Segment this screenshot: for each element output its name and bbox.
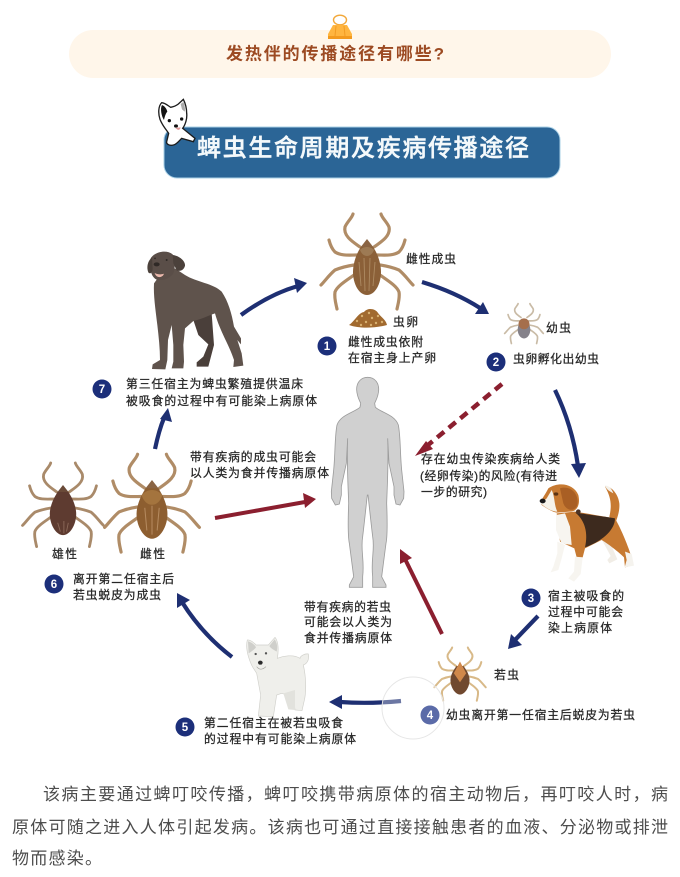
body paragraph: 原体可随之进入人体引起发病。该病也可通过直接接触患者的血液、分泌物或排泄	[12, 818, 668, 837]
larva body	[518, 318, 530, 338]
note: larva transmission risk: (经卵传染)的风险(有待进	[420, 469, 557, 483]
note: larva transmission risk: 一步的研究)	[421, 485, 487, 499]
step 5	[176, 716, 356, 746]
arrow: larva to beagle	[555, 390, 586, 478]
dog: third host (brown labrador)	[147, 252, 243, 369]
step 2: 虫卵孵化出幼虫	[513, 352, 599, 366]
step 1: 雌性成虫依附	[348, 335, 423, 349]
step 3	[522, 588, 624, 635]
tick: larva	[505, 304, 543, 344]
step 4: 4	[427, 710, 434, 722]
step 1: 在宿主身上产卵	[348, 351, 436, 365]
note: adult transmission: 带有疾病的成虫可能会	[190, 450, 316, 464]
icon: white puppy mascot	[159, 99, 195, 145]
male body	[50, 485, 76, 535]
note: larva transmission risk: 存在幼虫传染疾病给人类	[421, 452, 560, 466]
step 5: 5	[182, 722, 189, 734]
note: adult transmission	[190, 450, 329, 480]
arrow: nymph to second host	[329, 695, 401, 709]
step 6: 6	[51, 579, 57, 591]
stage labels: 幼虫	[546, 321, 571, 335]
westie: second host	[247, 637, 309, 717]
white ring overlay	[382, 677, 444, 739]
stage labels: 若虫	[494, 668, 519, 682]
tick body	[353, 239, 381, 295]
tick: female adult, sixth stage	[105, 454, 199, 552]
step 6	[44, 572, 174, 602]
stage labels: 虫卵	[393, 315, 418, 329]
step 6: 若虫蜕皮为成虫	[73, 588, 161, 602]
tick: male adult	[23, 463, 103, 547]
banner: lifecycle title	[164, 127, 560, 178]
step 6: 离开第二任宿主后	[73, 572, 174, 586]
step 3: 过程中可能会	[548, 605, 623, 619]
arrow: female adult to larva	[422, 282, 489, 314]
body paragraph: 物而感染。	[12, 849, 102, 868]
step 5: 的过程中有可能染上病原体	[204, 732, 356, 746]
female body	[137, 480, 167, 539]
step 1: 1	[324, 341, 331, 353]
eggs	[349, 309, 387, 328]
nymph body	[450, 662, 470, 695]
step 7: 被吸食的过程中有可能染上病原体	[126, 394, 317, 408]
human figure	[331, 377, 404, 587]
step 7: 7	[99, 384, 105, 396]
note: nymph transmission	[304, 600, 392, 645]
tick: nymph	[434, 648, 486, 701]
step 2	[486, 352, 599, 372]
tick: female adult	[321, 214, 413, 309]
note: nymph transmission: 食并传播病原体	[304, 631, 392, 645]
step 2: 2	[493, 357, 499, 369]
stage labels: 雌性	[140, 547, 165, 561]
beagle: first host	[540, 484, 634, 582]
note: adult transmission: 以人类为食并传播病原体	[190, 466, 329, 480]
icon: gold binder clip	[328, 15, 352, 39]
arrow: third host to female adult	[241, 278, 307, 315]
stage labels: 雄性	[52, 547, 77, 561]
stage labels	[52, 252, 571, 682]
step 5: 第二任宿主在被若虫吸食	[204, 716, 343, 730]
section heading pill	[69, 30, 611, 78]
body paragraph: 该病主要通过蜱叮咬传播，蜱叮咬携带病原体的宿主动物后，再叮咬人时，病	[43, 785, 668, 804]
body paragraph	[12, 785, 668, 868]
step 3: 3	[528, 593, 534, 605]
step 3: 宿主被吸食的	[548, 589, 624, 603]
note: larva transmission risk	[420, 452, 560, 499]
stage labels: 雌性成虫	[406, 252, 456, 266]
arrow: nymph infects human	[400, 549, 442, 634]
note: nymph transmission: 带有疾病的若虫	[304, 600, 391, 614]
arrow: beagle stage to nymph	[508, 616, 538, 649]
step 3: 染上病原体	[548, 621, 612, 635]
note: nymph transmission: 可能会以人类为	[304, 615, 392, 629]
step 1	[318, 335, 436, 365]
step 4	[420, 706, 635, 724]
step 7	[92, 377, 317, 408]
arrow: sixth stage to third host	[155, 408, 172, 449]
arrow: adult infects human	[215, 493, 316, 518]
heading text: 发热伴的传播途径有哪些?	[226, 44, 444, 64]
step 7: 第三任宿主为蜱虫繁殖提供温床	[126, 377, 303, 391]
step 4: 幼虫离开第一任宿主后蜕皮为若虫	[446, 708, 635, 722]
arrow: second host to sixth stage	[177, 593, 232, 657]
banner title text: 蜱虫生命周期及疾病传播途径	[197, 135, 529, 162]
arrow: larva may infect human (dashed)	[415, 384, 502, 456]
